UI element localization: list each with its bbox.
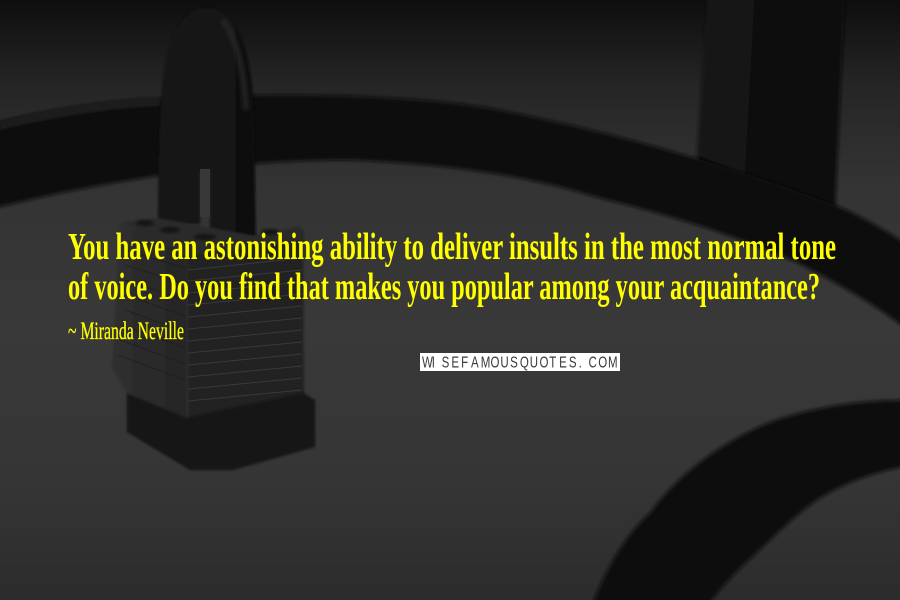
quote text (68, 226, 836, 345)
watermark badge (420, 353, 620, 371)
attribution: ~ Miranda Neville (68, 318, 184, 345)
padlock top plate (120, 218, 303, 256)
padlock (112, 8, 315, 470)
vertical iron bar top right (697, 0, 845, 215)
shackle highlight (222, 20, 246, 110)
padlock top rivets (136, 220, 279, 240)
padlock body side (112, 224, 187, 420)
padlock shackle (158, 8, 256, 238)
shackle gap (200, 169, 210, 217)
padlock side ridges (118, 250, 185, 380)
padlock layered ridges (188, 258, 302, 401)
rail highlight (0, 97, 160, 130)
padlock base (127, 393, 315, 470)
watermark text: WISEFAMOUSQUOTES.COM (422, 353, 618, 371)
curved iron rail (0, 95, 900, 332)
padlock body front (187, 230, 304, 424)
curved iron rail bottom right (590, 400, 900, 600)
